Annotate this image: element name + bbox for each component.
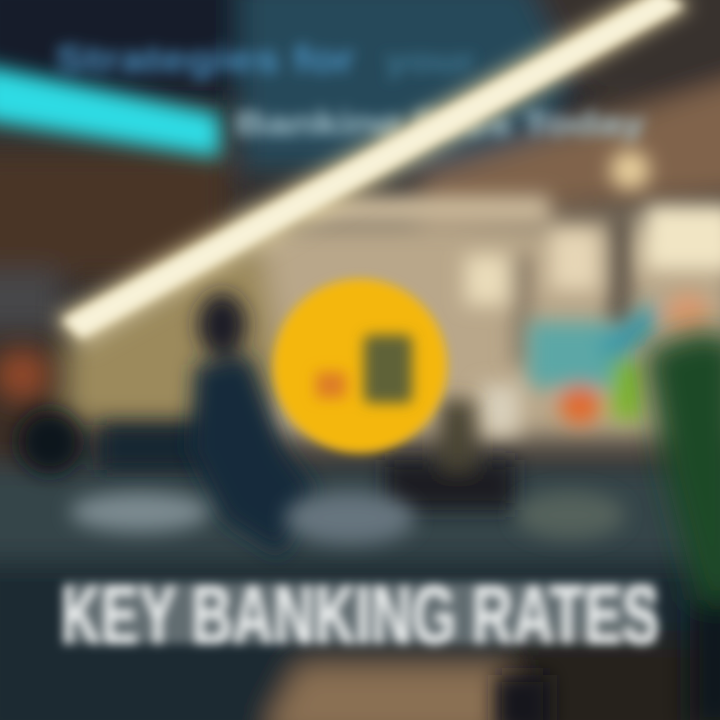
top text lines: Banking Fees Today bbox=[235, 105, 645, 143]
plant bbox=[645, 330, 720, 720]
table highlights bbox=[70, 491, 625, 544]
bottom dark figure bbox=[495, 675, 550, 720]
cyan neon sign bbox=[0, 64, 220, 158]
diagonal ceiling light beam bbox=[54, 0, 692, 348]
seated person silhouette bbox=[190, 293, 315, 555]
left orange accent bbox=[0, 349, 50, 401]
yellow circle badge bbox=[273, 279, 447, 453]
top text lines: Strategies for bbox=[55, 39, 355, 81]
right dark figure bbox=[385, 400, 515, 510]
teal and orange wall chart bbox=[480, 293, 710, 435]
top text lines bbox=[55, 39, 645, 143]
seated person, left background bbox=[18, 410, 210, 474]
top text lines: your bbox=[385, 43, 475, 79]
icon: bar chart in badge bbox=[316, 335, 412, 403]
ceiling details and lights bbox=[300, 150, 720, 365]
